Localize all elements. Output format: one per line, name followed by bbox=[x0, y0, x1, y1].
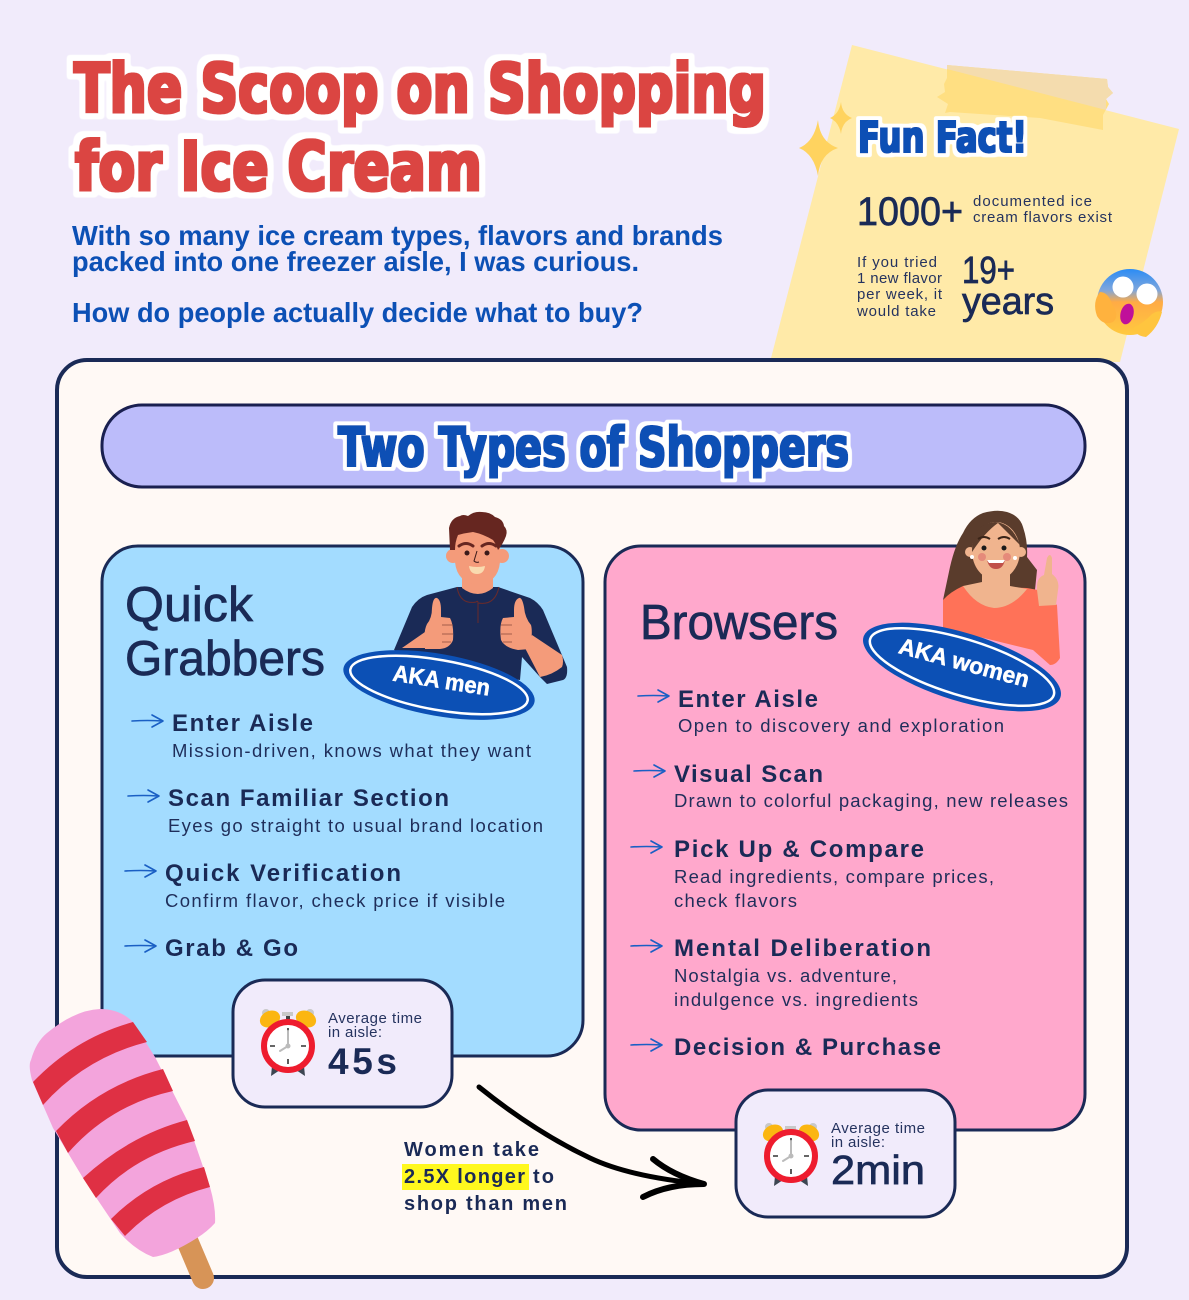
text block: women take longer: to bbox=[533, 1166, 554, 1188]
step: decision and purchase: Decision & Purchase bbox=[674, 1034, 941, 1061]
step: quick verification bbox=[125, 860, 505, 911]
illustration: woman pointing up bbox=[943, 511, 1060, 665]
browsers heading: Browsers bbox=[640, 596, 838, 650]
quick grabbers heading: Grabbers bbox=[125, 632, 325, 686]
step: scan familiar section bbox=[128, 785, 543, 836]
step: scan familiar section: Eyes go straight to usual brand location bbox=[168, 815, 543, 836]
step: visual scan bbox=[634, 761, 1068, 811]
callout: average time 2min bbox=[736, 1090, 955, 1217]
panel: browsers bbox=[605, 546, 1085, 1130]
step: mental deliberation bbox=[631, 935, 931, 1010]
subtitle text block: How do people actually decide what to buy? bbox=[72, 297, 643, 328]
step: grab and go: Grab & Go bbox=[165, 935, 298, 962]
title: for Ice Cream bbox=[75, 128, 482, 207]
step: pick up and compare: check flavors bbox=[674, 890, 797, 911]
step: enter aisle: Enter Aisle bbox=[172, 710, 313, 737]
text block: women take longer: shop than men bbox=[404, 1193, 567, 1215]
text block: women take longer: 2.5X longer bbox=[404, 1166, 525, 1188]
banner: two types of shoppers: Two Types of Shoppers bbox=[338, 416, 849, 479]
step: pick up and compare bbox=[631, 836, 994, 911]
callout: average time 2min: in aisle: bbox=[831, 1134, 885, 1151]
text block: women take longer bbox=[402, 1139, 567, 1215]
subtitle text block: packed into one freezer aisle, I was curious. bbox=[72, 246, 639, 277]
stat: 19+ years: 1 new flavor bbox=[857, 270, 942, 287]
callout: average time 2min: Average time bbox=[831, 1120, 925, 1137]
callout: average time 45s bbox=[233, 980, 452, 1107]
title bbox=[74, 50, 766, 207]
subtitle text block bbox=[72, 220, 723, 328]
badge: AKA men bbox=[338, 638, 540, 732]
title: The Scoop on Shopping bbox=[74, 50, 766, 129]
step: mental deliberation: indulgence vs. ingredients bbox=[674, 989, 918, 1010]
fun fact heading: Fun Fact! bbox=[858, 113, 1027, 163]
stat: 1000+ flavors: documented ice bbox=[973, 193, 1092, 210]
step: pick up and compare: Pick Up & Compare bbox=[674, 836, 924, 863]
step: enter aisle bbox=[132, 710, 531, 761]
quick grabbers heading bbox=[125, 578, 325, 686]
stat: 19+ years: would take bbox=[856, 303, 936, 320]
stat: 1000+ flavors bbox=[857, 190, 1113, 234]
icon: alarm clock bbox=[760, 1121, 822, 1186]
quick grabbers heading: Quick bbox=[125, 578, 253, 632]
stat: 19+ years: 19+ bbox=[962, 250, 1015, 292]
step: enter aisle: Mission-driven, knows what they want bbox=[172, 740, 531, 761]
icon: shocked emoji bbox=[1095, 269, 1163, 337]
icon: alarm clock bbox=[257, 1007, 319, 1076]
step: visual scan: Visual Scan bbox=[674, 761, 823, 788]
icon: sparkles bbox=[799, 102, 852, 176]
panel: fun fact sticky note bbox=[770, 45, 1179, 362]
stat: 1000+ flavors: 1000+ bbox=[857, 190, 963, 234]
illustration: man with thumbs up bbox=[394, 512, 567, 684]
stat: 19+ years bbox=[856, 250, 1054, 323]
callout: average time 45s: Average time bbox=[328, 1010, 422, 1027]
step: mental deliberation: Mental Deliberation bbox=[674, 935, 931, 962]
badge: AKA men: AKA men bbox=[391, 660, 492, 701]
step: pick up and compare: Read ingredients, compare prices, bbox=[674, 866, 994, 887]
stat: 1000+ flavors: cream flavors exist bbox=[973, 209, 1113, 226]
panel: main card bbox=[57, 360, 1127, 1277]
icon: tape bbox=[937, 65, 1113, 130]
step: quick verification: Quick Verification bbox=[165, 860, 401, 887]
callout: average time 45s: in aisle: bbox=[328, 1024, 382, 1041]
arrow: to women's time bbox=[479, 1087, 704, 1197]
step: visual scan: Drawn to colorful packaging, new releases bbox=[674, 790, 1068, 811]
step: mental deliberation: Nostalgia vs. adventure, bbox=[674, 965, 897, 986]
subtitle text block: With so many ice cream types, flavors and brands bbox=[72, 220, 723, 251]
illustration: popsicle bbox=[30, 1009, 215, 1278]
panel: quick grabbers bbox=[102, 546, 583, 1056]
badge: AKA women: AKA women bbox=[896, 633, 1032, 692]
stat: 19+ years: If you tried bbox=[857, 254, 937, 271]
step: quick verification: Confirm flavor, check price if visible bbox=[165, 890, 505, 911]
step: enter aisle bbox=[638, 686, 1004, 736]
callout: average time 45s: 45s bbox=[328, 1041, 397, 1082]
badge: AKA women bbox=[854, 604, 1070, 730]
step: enter aisle: Open to discovery and exploration bbox=[678, 715, 1004, 736]
stat: 19+ years: per week, it bbox=[857, 286, 943, 303]
stat: 19+ years: years bbox=[962, 281, 1054, 323]
step: scan familiar section: Scan Familiar Section bbox=[168, 785, 449, 812]
step: enter aisle: Enter Aisle bbox=[678, 686, 818, 713]
text block: women take longer: Women take bbox=[404, 1139, 539, 1161]
banner: two types of shoppers bbox=[102, 405, 1085, 487]
callout: average time 2min: 2min bbox=[831, 1147, 925, 1193]
